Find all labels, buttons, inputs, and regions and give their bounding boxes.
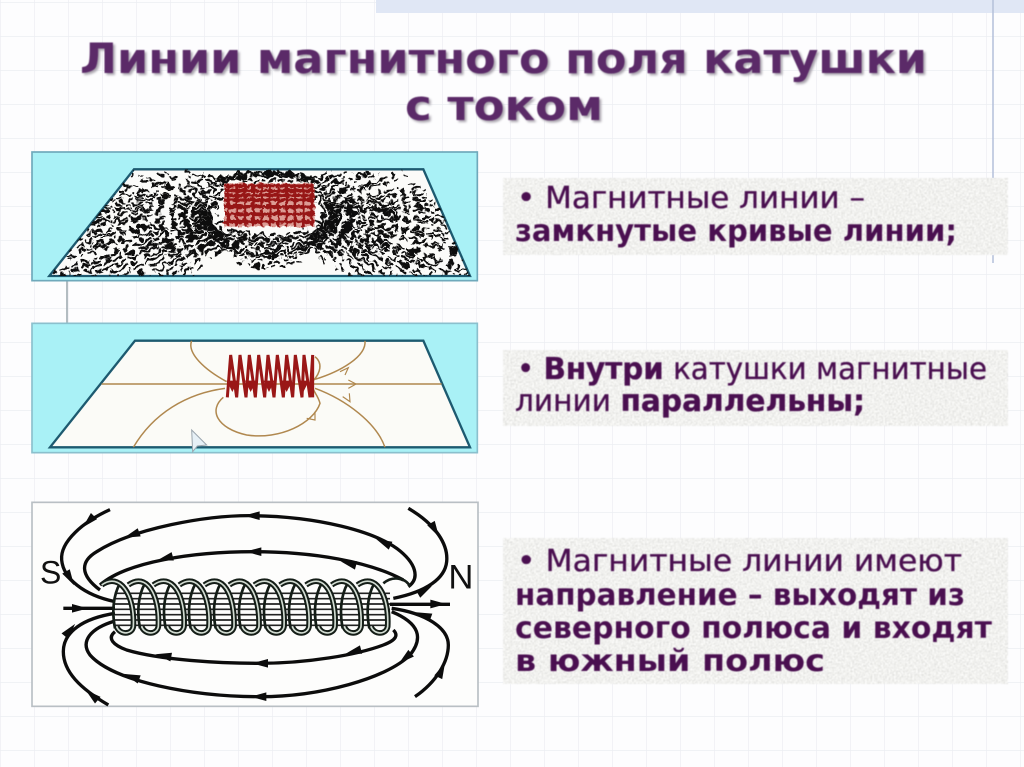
text block: direction of lines: в южный полюс: [515, 644, 825, 679]
cursor: [192, 430, 207, 452]
field lines: [102, 341, 442, 447]
panel: magnetic field line diagram on a plane: [32, 323, 477, 453]
text block: direction of lines: [503, 538, 1008, 684]
field lines: [62, 508, 450, 705]
text block: closed curves: • Магнитные линии –: [517, 181, 865, 216]
text block: parallel inside coil: линии параллельны;: [515, 384, 865, 419]
inner parallel lines: [115, 593, 390, 625]
title: Линии магнитного поля катушки: [80, 34, 927, 83]
dark filing clusters: [153, 176, 397, 267]
title: с током: [405, 81, 603, 130]
panel: solenoid with field lines: [32, 502, 478, 706]
text block: direction of lines: северного полюса и входят: [515, 611, 993, 646]
pole label S: S: [40, 554, 61, 590]
panel: iron filings around a coil: [32, 152, 486, 281]
text block: direction of lines: направление – выходят из: [515, 578, 965, 613]
text block: direction of lines: • Магнитные линии имеют: [517, 544, 962, 579]
coil windings: [102, 579, 410, 633]
title: [80, 34, 927, 130]
iron filings pattern: [48, 171, 486, 277]
text block: closed curves: [503, 178, 1008, 255]
text block: closed curves: замкнутые кривые линии;: [515, 214, 957, 249]
arrowheads: [62, 511, 449, 703]
text block: parallel inside coil: • Внутри катушки магнитные: [517, 352, 987, 387]
red coil: [224, 183, 315, 227]
text block: parallel inside coil: [503, 350, 1008, 426]
coil arrowheads: [227, 381, 309, 392]
red coil: [227, 355, 313, 397]
pole label N: N: [448, 558, 473, 596]
